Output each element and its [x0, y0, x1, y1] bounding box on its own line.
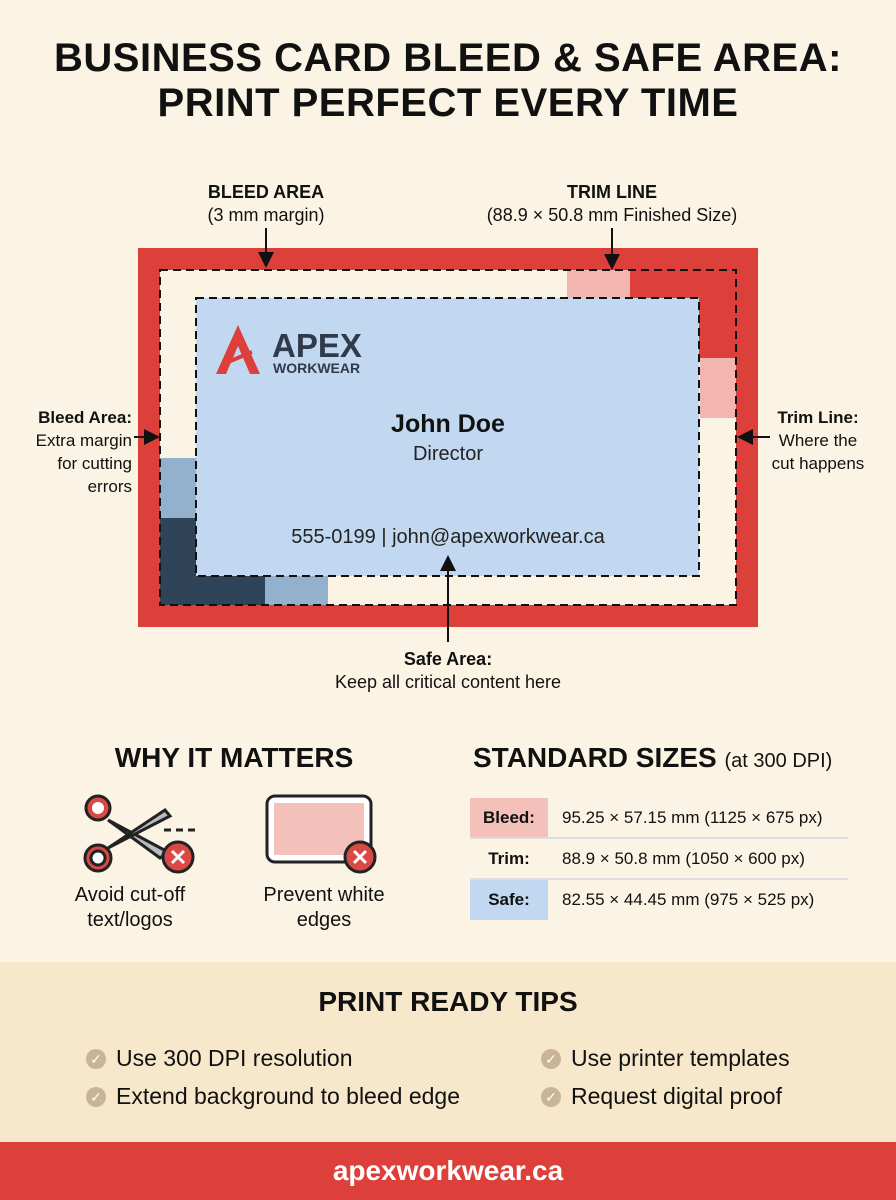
- panel: print ready tips: ✓: [545, 1051, 557, 1067]
- title: PRINT PERFECT EVERY TIME: [158, 81, 738, 125]
- panel: print ready tips: Use printer templates: [571, 1045, 790, 1071]
- panel: print ready tips: [0, 962, 896, 1142]
- label: bleed area left: Bleed Area:: [38, 408, 132, 427]
- table: sizes: 95.25 × 57.15 mm (1125 × 675 px): [562, 808, 823, 826]
- panel: print ready tips: Extend background to bleed edge: [116, 1083, 460, 1109]
- safe area: APEX: [272, 327, 362, 364]
- caption: cut-off: Avoid cut-off: [75, 884, 185, 906]
- label: bleed area left: for cutting: [57, 454, 132, 473]
- label: trim line right: Where the: [779, 431, 857, 450]
- trim line dashed: [160, 270, 736, 605]
- heading: tips: PRINT READY TIPS: [318, 986, 578, 1017]
- table: sizes: Bleed:: [483, 808, 535, 826]
- label: safe area: Keep all critical content here: [335, 672, 561, 692]
- tips list: [86, 1045, 790, 1109]
- safe area: Director: [413, 443, 483, 465]
- caption: white edges: edges: [297, 909, 351, 931]
- table: sizes: 82.55 × 44.45 mm (975 × 525 px): [562, 890, 814, 909]
- footer: [0, 1142, 896, 1200]
- heading: standard sizes: STANDARD SIZES (at 300 DPI): [473, 742, 832, 773]
- label: safe area: Safe Area:: [404, 649, 492, 669]
- title: [54, 36, 842, 125]
- logo icon: [216, 325, 260, 374]
- safe area: 555-0199 | john@apexworkwear.ca: [291, 526, 606, 548]
- panel: print ready tips: ✓: [90, 1051, 102, 1067]
- caption: cut-off: text/logos: [87, 909, 173, 931]
- arrows: [134, 228, 770, 642]
- table: sizes: 88.9 × 50.8 mm (1050 × 600 px): [562, 848, 805, 868]
- safe area: WORKWEAR: [273, 360, 360, 376]
- label: trim line top: TRIM LINE: [567, 182, 657, 202]
- panel: print ready tips: Request digital proof: [571, 1083, 782, 1109]
- label: bleed area left: [36, 408, 132, 496]
- label: trim line right: Trim Line:: [777, 408, 859, 427]
- label: bleed area left: Extra margin: [36, 431, 132, 450]
- table: sizes: Trim:: [488, 848, 530, 868]
- footer: apexworkwear.ca: [333, 1155, 563, 1186]
- table: sizes: Safe:: [488, 890, 530, 909]
- label: bleed area top: BLEED AREA: [208, 182, 324, 202]
- label: trim line top: (88.9 × 50.8 mm Finished Size): [487, 205, 737, 225]
- label: bleed area top: (3 mm margin): [207, 205, 324, 225]
- caption: cut-off: [74, 884, 186, 931]
- safe area: [196, 298, 699, 576]
- icon: scissors: [84, 794, 195, 874]
- card diagram: [134, 228, 770, 642]
- caption: white edges: [263, 884, 385, 931]
- bleed area red: [138, 248, 758, 627]
- safe area: John Doe: [391, 410, 505, 438]
- label: bleed area left: errors: [88, 477, 132, 496]
- panel: print ready tips: ✓: [90, 1089, 102, 1105]
- icon: card white edge: [266, 794, 376, 874]
- caption: white edges: Prevent white: [263, 884, 385, 906]
- title: BUSINESS CARD BLEED & SAFE AREA:: [54, 36, 842, 80]
- label: safe area: [335, 649, 561, 692]
- label: trim line top: [487, 182, 737, 225]
- table: sizes: [470, 798, 848, 920]
- label: bleed area top: [207, 182, 324, 225]
- panel: print ready tips: ✓: [545, 1089, 557, 1105]
- panel: print ready tips: Use 300 DPI resolution: [116, 1045, 353, 1071]
- label: trim line right: [772, 408, 864, 473]
- heading: why it matters: WHY IT MATTERS: [115, 742, 353, 773]
- label: trim line right: cut happens: [772, 454, 864, 473]
